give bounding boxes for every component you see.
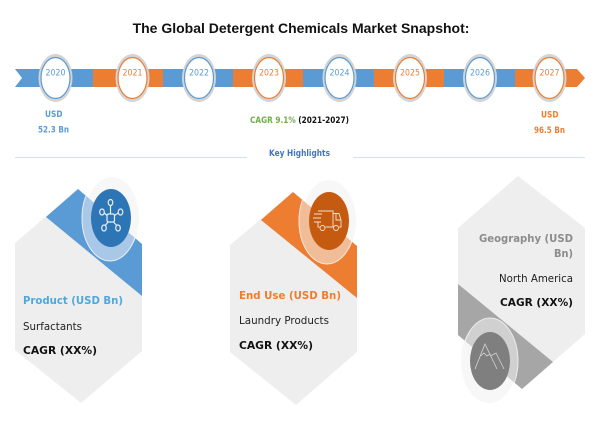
year marker 2023: 2023: [259, 68, 279, 78]
year marker 2021: 2021: [122, 68, 142, 78]
year marker 2026: [463, 54, 497, 102]
geography text: North America: [499, 273, 573, 285]
year marker 2024: [322, 54, 356, 102]
icon: mountain: [475, 344, 504, 369]
product text: [23, 296, 123, 357]
panel: geography: [458, 176, 585, 404]
timeline ribbon: [15, 69, 585, 87]
year marker 2023: [252, 54, 286, 102]
end use text: CAGR (XX%): [239, 340, 313, 352]
end use text: Laundry Products: [239, 315, 329, 327]
year marker 2025: [393, 54, 427, 102]
year marker 2022: [182, 54, 216, 102]
end use text: End Use (USD Bn): [239, 291, 341, 302]
title: The Global Detergent Chemicals Market Snapshot:: [133, 20, 469, 36]
CAGR label: CAGR 9.1% (2021-2027): [250, 116, 349, 126]
value 2020: USD: [45, 110, 62, 120]
key highlights heading: Key Highlights: [269, 149, 330, 159]
value 2020: 52.3 Bn: [38, 126, 69, 136]
product text: CAGR (XX%): [23, 345, 97, 357]
year marker 2025: 2025: [400, 68, 420, 78]
year marker 2026: 2026: [470, 68, 490, 78]
icon: molecule: [100, 200, 123, 231]
year marker 2021: [116, 54, 150, 102]
year marker 2020: 2020: [46, 68, 66, 78]
value 2027: [534, 110, 565, 136]
product text: Product (USD Bn): [23, 296, 123, 307]
year marker 2027: 2027: [540, 68, 560, 78]
panel: product: [15, 175, 142, 403]
geography text: Geography (USD: [479, 234, 573, 245]
geography text: CAGR (XX%): [500, 297, 573, 309]
year marker 2024: 2024: [330, 68, 350, 78]
product text: Surfactants: [23, 321, 82, 333]
panel: end use: [230, 178, 357, 405]
year marker 2022: 2022: [189, 68, 209, 78]
year marker 2020: [38, 54, 72, 102]
value 2020: [38, 110, 69, 136]
value 2027: 96.5 Bn: [534, 126, 565, 136]
value 2027: USD: [541, 110, 558, 120]
end use text: [239, 291, 341, 352]
geography text: [479, 234, 573, 309]
geography text: Bn): [554, 249, 573, 260]
year marker 2027: [532, 54, 566, 102]
icon: delivery truck: [313, 211, 341, 230]
